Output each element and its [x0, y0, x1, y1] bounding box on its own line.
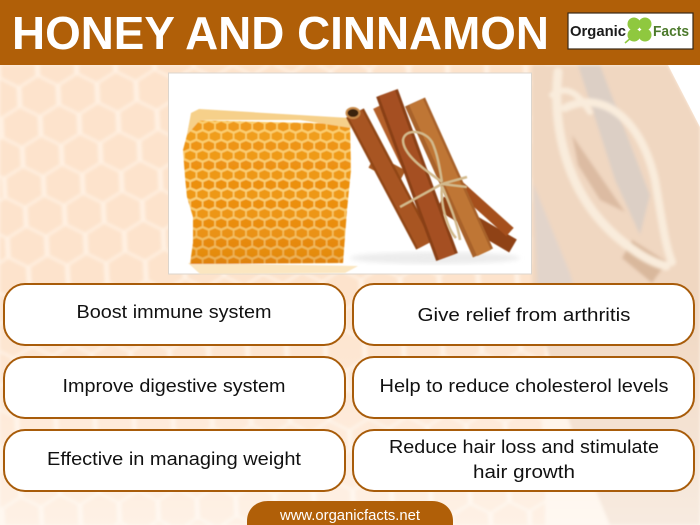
logo: Organic Facts [568, 13, 693, 49]
benefit: cholesterol levels: Help to reduce cholesterol levels [380, 375, 668, 396]
footer: website: www.organicfacts.net [279, 508, 420, 524]
benefit: relief from arthritis: Give relief from arthritis [418, 304, 630, 325]
header bar [0, 0, 700, 65]
logo: Organic Facts: Facts [653, 23, 689, 40]
icon: clover [625, 18, 652, 43]
benefit: hair loss and growth: Reduce hair loss and stimulate [389, 436, 659, 457]
benefit: digestive system: Improve digestive system [62, 375, 286, 396]
benefit: boost immune system [4, 284, 345, 345]
cinnamon sticks [346, 93, 513, 257]
photo: honeycomb and cinnamon sticks [168, 73, 532, 274]
benefit: hair loss and growth [353, 430, 694, 491]
footer: website [247, 501, 453, 525]
benefit: managing weight [4, 430, 345, 491]
benefit: hair loss and growth: hair growth [473, 461, 575, 482]
shadow under sticks [350, 252, 520, 264]
twine bow [400, 132, 467, 240]
logo: Organic Facts: Organic [570, 23, 626, 40]
benefit: boost immune system: Boost immune system [76, 301, 272, 322]
title: HONEY AND CINNAMON [12, 7, 549, 59]
benefit: managing weight: Effective in managing weight [47, 448, 301, 469]
benefit: cholesterol levels [353, 357, 694, 418]
honeycomb [183, 109, 358, 274]
benefit: relief from arthritis [353, 284, 694, 345]
benefit: digestive system [4, 357, 345, 418]
